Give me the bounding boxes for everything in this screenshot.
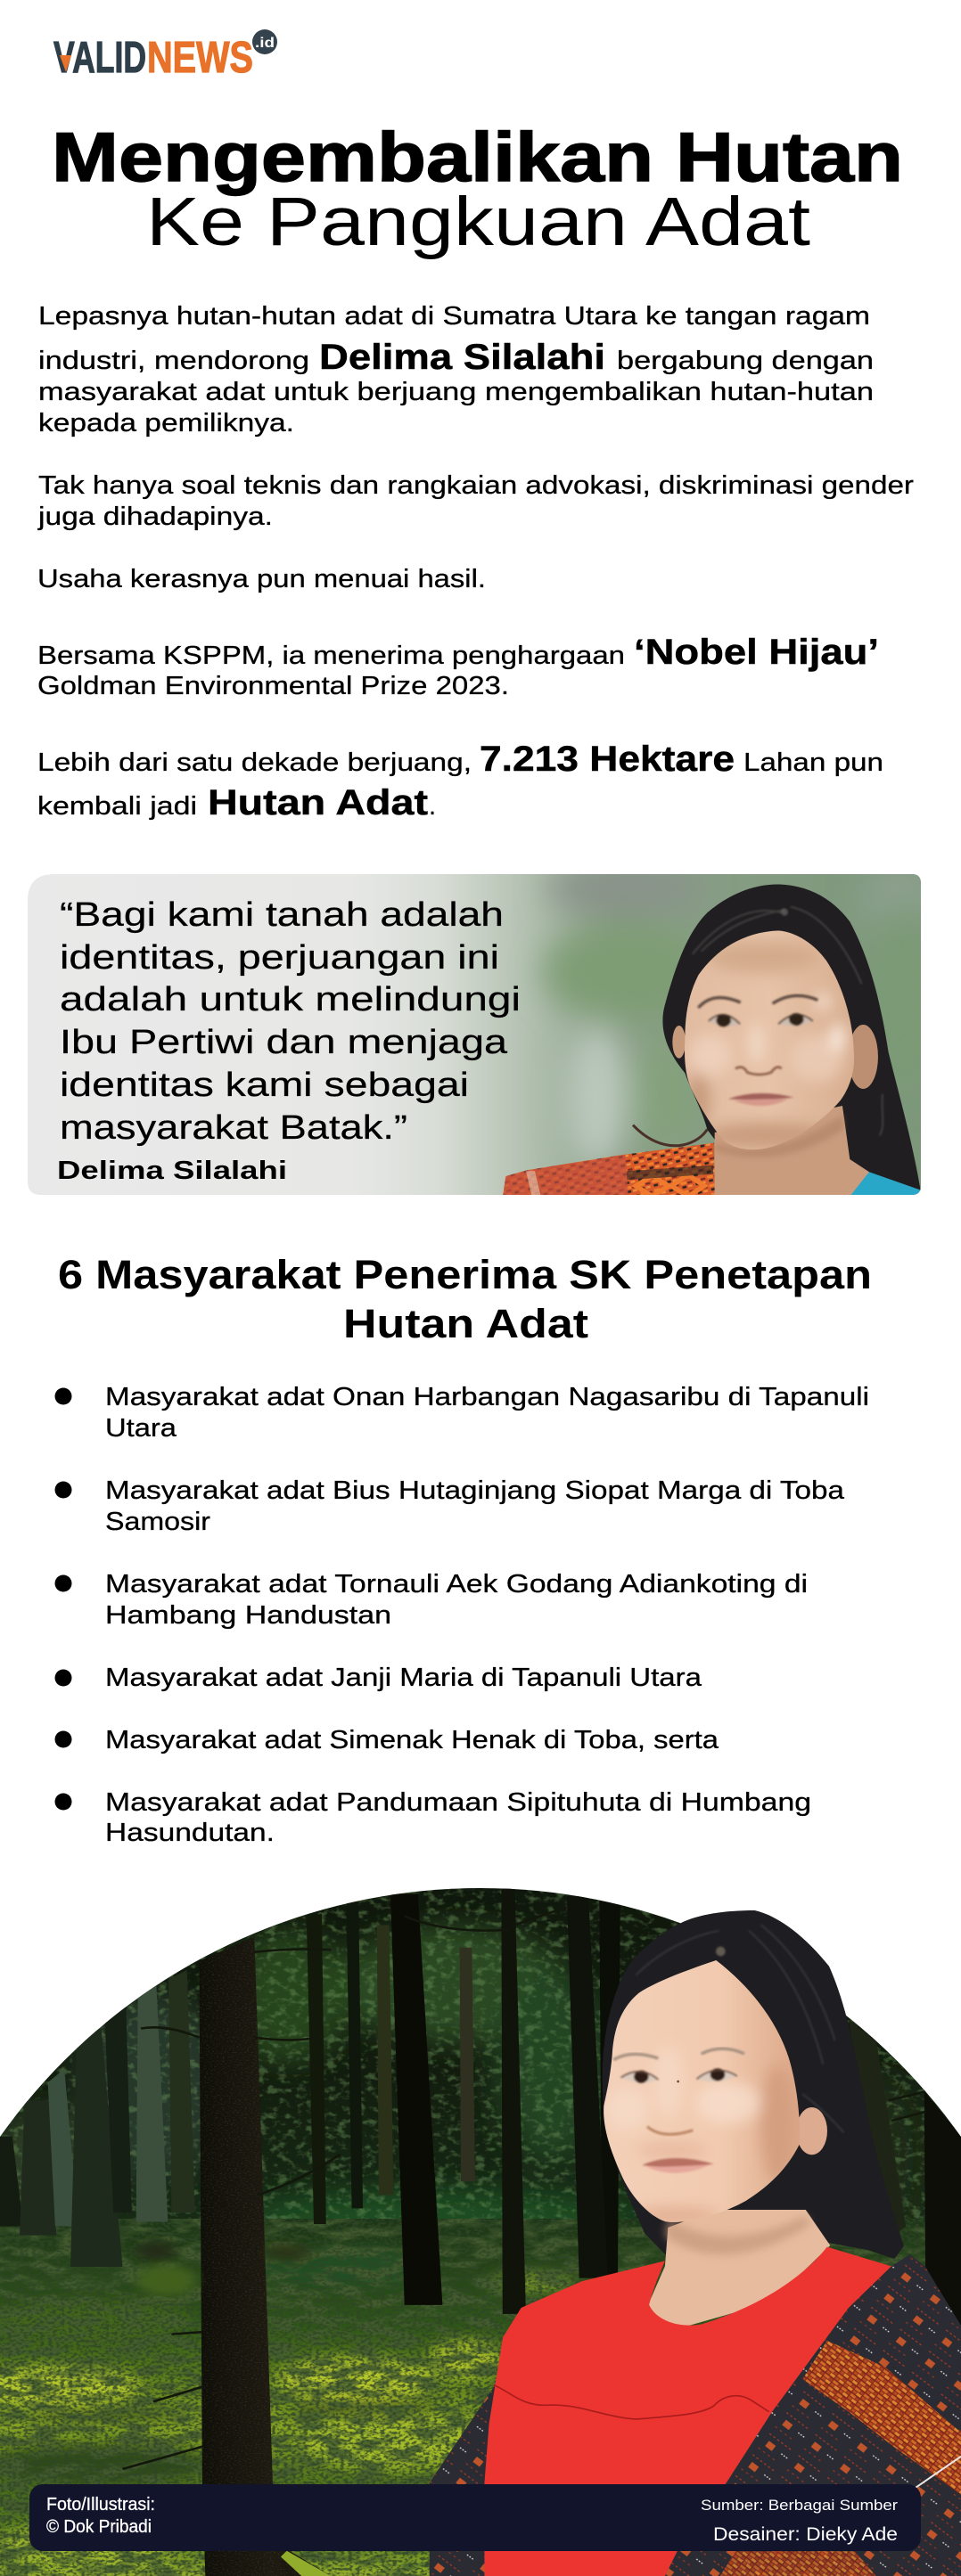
nose — [735, 1067, 782, 1075]
footer bar — [29, 2484, 921, 2551]
text block: intro paragraph — [38, 302, 874, 438]
text block: discrimination paragraph — [37, 471, 914, 531]
panel: quote card — [28, 863, 939, 1197]
eyes — [709, 1013, 813, 1026]
text block: intro paragraph: Delima Silalahi — [319, 338, 605, 377]
neck — [715, 1106, 869, 1197]
text block: hectare result: Lahan pun — [743, 748, 883, 777]
hair — [603, 1910, 904, 2259]
nose — [647, 2127, 693, 2134]
list item 2: Samosir — [105, 1508, 210, 1536]
quote text: identitas, perjuangan ini — [60, 939, 499, 977]
list item 6: Hasundutan. — [105, 1819, 275, 1847]
moss on trunk foot — [281, 2551, 331, 2576]
text block: intro paragraph: industri, mendorong — [38, 347, 309, 375]
ulos left — [430, 2385, 495, 2576]
logo: Validnews.id — [53, 29, 277, 82]
list item 3 — [55, 1570, 808, 1630]
photo: woman in red shirt — [430, 1910, 961, 2576]
branches — [123, 1907, 925, 2469]
list item 3: Hambang Handustan — [105, 1601, 391, 1630]
logo: Validnews.id: NEWS — [147, 34, 253, 82]
main trunks — [390, 1893, 442, 2305]
text block: Goldman prize: Goldman Environmental Prize 2023. — [37, 672, 509, 700]
text block: intro paragraph: masyarakat adat untuk berjuang mengembalikan hutan-hutan — [38, 378, 874, 406]
blue top — [712, 1172, 921, 1197]
text block: hectare result: Lebih dari satu dekade berjuang, — [37, 748, 472, 777]
text block: hectare result — [37, 740, 883, 822]
quote text: “Bagi kami tanah adalah — [60, 896, 504, 934]
text block: hectare result: Hutan Adat — [208, 783, 428, 822]
list: six indigenous communities — [55, 1383, 869, 1847]
text block: discrimination paragraph: Tak hanya soal teknis dan rangkaian advokasi, diskriminasi gender — [38, 471, 914, 500]
hair — [662, 885, 921, 1190]
text block: Goldman prize: Bersama KSPPM, ia menerima penghargaan — [37, 642, 625, 670]
text block: intro paragraph: bergabung dengan — [617, 347, 874, 375]
list item 1 — [55, 1383, 869, 1443]
text block: intro paragraph: Lepasnya hutan-hutan adat di Sumatra Utara ke tangan ragam — [38, 302, 870, 331]
heading: six communities: Hutan Adat — [343, 1301, 588, 1346]
quote text: identitas kami sebagai — [60, 1067, 469, 1104]
neck — [648, 2210, 830, 2332]
title — [52, 118, 903, 260]
lips — [728, 1093, 794, 1106]
ears — [849, 1025, 878, 1089]
quote text: Ibu Pertiwi dan menjaga — [60, 1024, 508, 1061]
text block: Goldman prize — [37, 633, 879, 700]
brows — [698, 998, 741, 1008]
face — [600, 1958, 827, 2225]
photo credit: © Dok Pribadi — [46, 2517, 152, 2537]
text block: result sentence: Usaha kerasnya pun menuai hasil. — [37, 565, 486, 593]
logo: Validnews.id: VALID — [53, 34, 146, 82]
face — [685, 930, 854, 1149]
quote text: adalah untuk melindungi — [60, 981, 521, 1018]
text block: hectare result: kembali jadi — [37, 792, 197, 821]
lips — [642, 2158, 714, 2173]
list item 6: Masyarakat adat Pandumaan Sipituhuta di Humbang — [105, 1788, 811, 1817]
list item 2 — [55, 1476, 845, 1536]
list item 2: Masyarakat adat Bius Hutaginjang Siopat Marga di Toba — [105, 1476, 845, 1505]
photo credit: Foto/Illustrasi: — [46, 2495, 155, 2515]
photo credit — [46, 2495, 155, 2537]
text block: hectare result: . — [429, 792, 436, 821]
title: Ke Pangkuan Adat — [146, 184, 810, 260]
source credit — [701, 2497, 898, 2545]
list item 1: Masyarakat adat Onan Harbangan Nagasaribu di Tapanuli — [105, 1383, 869, 1411]
source credit: Sumber: Berbagai Sumber — [701, 2497, 898, 2514]
list item 3: Masyarakat adat Tornauli Aek Godang Adiankoting di — [105, 1570, 808, 1599]
text block: hectare result: 7.213 Hektare — [480, 740, 735, 779]
text block: Goldman prize: ‘Nobel Hijau’ — [634, 633, 879, 672]
quote attribution: Delima Silalahi — [57, 1157, 287, 1185]
heading: six communities — [58, 1252, 872, 1346]
quote text: masyarakat Batak.” — [60, 1109, 407, 1147]
logo: Validnews.id: .id — [255, 36, 275, 51]
heading: six communities: 6 Masyarakat Penerima SK Penetapan — [58, 1252, 872, 1297]
photo: woman portrait — [503, 885, 921, 1197]
text block: intro paragraph: kepada pemiliknya. — [38, 409, 294, 438]
brows — [613, 2054, 658, 2060]
list item 6 — [55, 1788, 811, 1847]
list item 5: Masyarakat adat Simenak Henak di Toba, serta — [105, 1726, 719, 1754]
quote text — [60, 896, 521, 1147]
woven cloth — [503, 1143, 715, 1197]
shirt and cloth — [430, 2210, 961, 2576]
red shirt — [484, 2247, 891, 2576]
moss mounds — [136, 2241, 311, 2295]
background trunks — [0, 1901, 961, 2330]
text block: discrimination paragraph: juga dihadapinya. — [37, 503, 273, 531]
ulos right — [665, 2254, 961, 2576]
source credit: Desainer: Dieky Ade — [713, 2524, 898, 2545]
eyes — [621, 2068, 737, 2083]
title: Mengembalikan Hutan — [52, 118, 903, 196]
list item 4: Masyarakat adat Janji Maria di Tapanuli Utara — [105, 1664, 702, 1692]
panel: forest photo in circle — [0, 1880, 961, 2576]
moss light patches — [0, 2246, 576, 2568]
list item 1: Utara — [105, 1414, 177, 1443]
